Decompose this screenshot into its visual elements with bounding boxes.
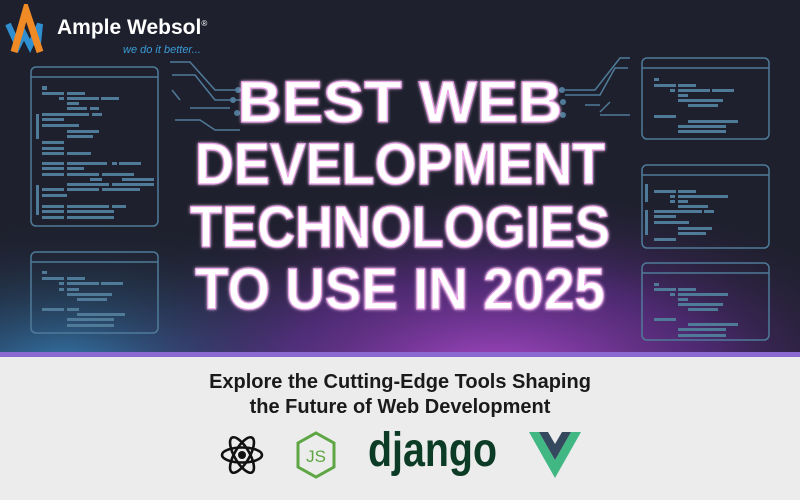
logo: Ample Websol [5,4,208,56]
title: TO USE IN 2025 [195,257,605,322]
subtitle [209,371,591,418]
subtitle: the Future of Web Development [250,396,550,418]
icon: node js: JS [306,447,326,466]
title: DEVELOPMENT [195,132,605,197]
icon: react [220,436,264,474]
hero banner [0,0,800,357]
logo: Ample Websol: we do it better... [123,44,201,56]
subtitle: Explore the Cutting-Edge Tools Shaping [209,371,591,393]
title [190,70,610,322]
title: TECHNOLOGIES [190,195,610,260]
title: BEST WEB [238,70,562,135]
icon: node js [296,431,336,479]
icon: vue [529,432,581,478]
logo: Ample Websol: Ample Websol® [57,16,207,39]
